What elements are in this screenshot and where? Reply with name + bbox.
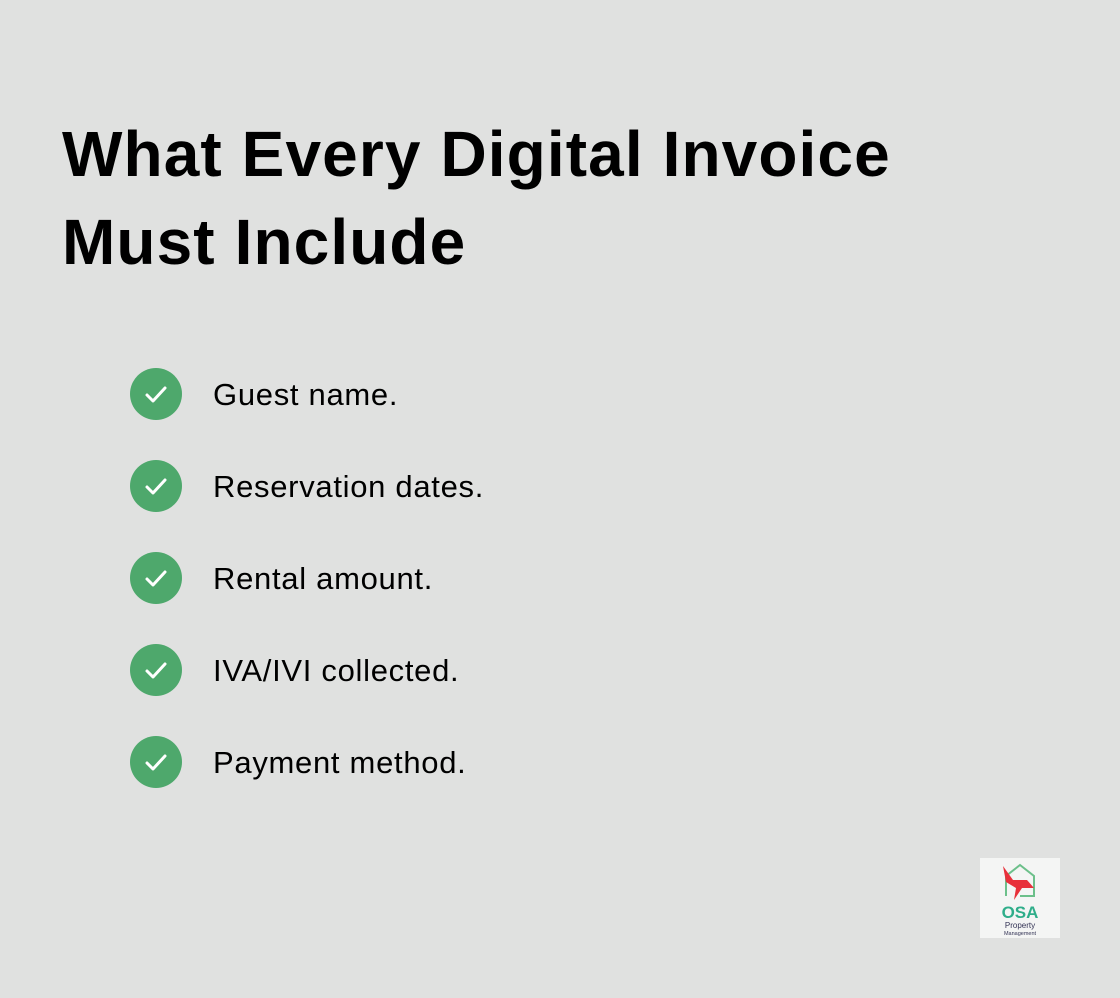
icon: check [130, 736, 182, 788]
icon: check [130, 552, 182, 604]
item: rental amount: Rental amount. [213, 561, 433, 596]
item: guest name [130, 368, 398, 420]
item: guest name: Guest name. [213, 377, 398, 412]
logo [980, 858, 1060, 938]
item: IVA/IVI [130, 644, 459, 696]
item: IVA/IVI: IVA/IVI collected. [213, 653, 459, 688]
logo: Property [1005, 921, 1035, 930]
item: payment method: Payment method. [213, 745, 466, 780]
item: rental amount [130, 552, 433, 604]
item: reservation dates: Reservation dates. [213, 469, 484, 504]
title [62, 118, 891, 278]
title: Must Include [62, 206, 466, 278]
icon: check [130, 460, 182, 512]
icon: check [130, 644, 182, 696]
logo: Management [1004, 931, 1037, 937]
icon: check [130, 368, 182, 420]
item: payment method [130, 736, 466, 788]
item: reservation dates [130, 460, 484, 512]
logo: OSA [1002, 903, 1038, 922]
title: What Every Digital Invoice [62, 118, 891, 190]
